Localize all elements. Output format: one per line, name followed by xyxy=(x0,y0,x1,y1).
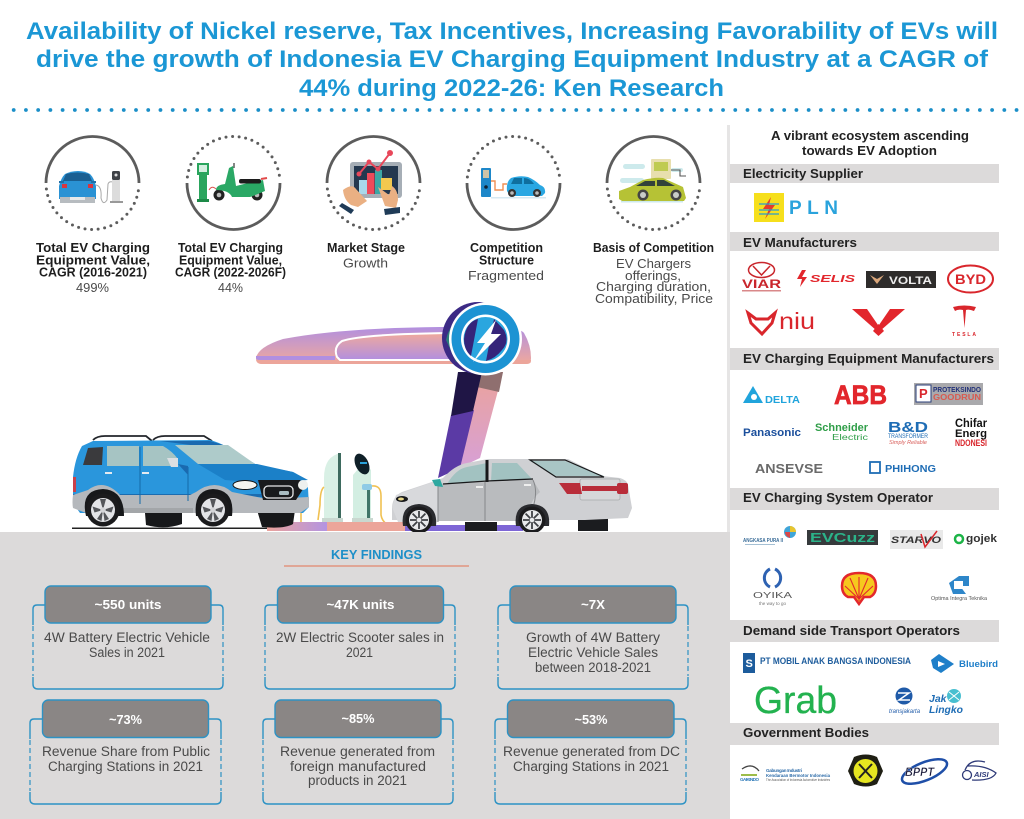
logo: PT Mobil Anak Bangsa: PT MOBIL ANAK BANGSA INDONESIA xyxy=(760,656,911,667)
logo: Gojek: gojek xyxy=(966,533,998,545)
logo: Schneider Electric xyxy=(815,422,869,442)
label xyxy=(327,241,405,270)
logo: Schneider Electric: Schneider xyxy=(815,422,869,434)
stat: competition structure xyxy=(467,137,560,283)
label xyxy=(593,241,714,306)
card: 73%: Revenue Share from Public xyxy=(42,744,210,759)
logo: JakLingko: Jak xyxy=(929,693,948,705)
section: government bodies: Government Bodies xyxy=(743,725,869,740)
card: 47K units: 2W Electric Scooter sales in xyxy=(276,630,444,645)
logo: Transjakarta: transjakarta xyxy=(889,709,921,715)
logo: BYD xyxy=(948,266,993,292)
card: 85% xyxy=(263,700,453,804)
logo: B&D Transformer: TRANSFORMER xyxy=(888,434,929,440)
label xyxy=(36,241,150,295)
logo: Panasonic: Panasonic xyxy=(743,427,801,439)
icon: green scooter at charger xyxy=(197,163,267,202)
label: Charging duration, xyxy=(596,280,711,294)
label: Competition xyxy=(470,241,543,255)
card: 53% xyxy=(495,700,686,804)
card: 73%: ~73% xyxy=(109,713,142,727)
logo: Ansevse: ANSEVSE xyxy=(755,461,823,476)
logo: Phihong xyxy=(870,462,936,475)
label: 44% xyxy=(218,281,243,295)
card: 550 units: ~550 units xyxy=(94,598,162,612)
logo: EVCuzz: EVCuzz xyxy=(810,530,876,545)
title: Availability of Nickel reserve, Tax Incentives, Increasing Favorability of EVs will xyxy=(26,18,998,45)
logo: ABB: ABB xyxy=(834,380,887,410)
card: 550 units xyxy=(33,586,223,689)
logo: B&D Transformer: B&D xyxy=(888,419,928,436)
card: 7X: Electric Vehicle Sales xyxy=(528,645,658,660)
label: Equipment Value, xyxy=(36,254,150,268)
section: EV charging equipment manufacturers: EV Charging Equipment Manufacturers xyxy=(743,351,994,366)
logo: Gaikindo: Kendaraan Bermotor Indonesia xyxy=(766,773,830,778)
logo: Volta xyxy=(866,271,936,288)
logo: Chifar Energi Indonesia: NDONESI xyxy=(955,438,987,449)
card: 53%: Charging Stations in 2021 xyxy=(513,759,669,774)
logo: BPPT: BPPT xyxy=(905,767,935,779)
card: 85%: Revenue generated from xyxy=(280,744,435,759)
logo: AISI xyxy=(962,761,996,780)
logo: JakLingko: Lingko xyxy=(929,704,964,716)
logo: Chifar Energi Indonesia xyxy=(955,416,987,449)
heading: ecosystem xyxy=(771,128,969,158)
logo: Starvo: STARVO xyxy=(891,535,941,545)
card: 53%: Revenue generated from DC xyxy=(503,744,680,759)
logo: Tesla: TESLA xyxy=(952,332,976,338)
logo: Bluebird xyxy=(931,654,998,673)
logo: JakLingko xyxy=(929,689,964,716)
logo: Selis: SELIS xyxy=(810,274,855,285)
logo: PT Mobil Anak Bangsa: S xyxy=(746,658,753,670)
label: Structure xyxy=(479,254,534,268)
silver sedan xyxy=(392,459,632,534)
logo: Delta: DELTA xyxy=(765,394,800,406)
logo: Proteksindo Goodrun: GOODRUN xyxy=(933,393,981,402)
logo: Oyika xyxy=(753,569,792,606)
card: 7X: Growth of 4W Battery xyxy=(526,630,660,645)
card: 73% xyxy=(30,700,221,804)
logo: BPPT xyxy=(899,754,950,789)
logo: Proteksindo Goodrun xyxy=(914,383,983,405)
card: 550 units: 4W Battery Electric Vehicle xyxy=(44,630,210,645)
logo: Viar: VIAR xyxy=(742,277,781,291)
logo: Proteksindo Goodrun: P xyxy=(919,386,928,401)
label: Total EV Charging xyxy=(178,241,283,255)
logo: Starvo xyxy=(890,530,943,549)
logo: Grab: Grab xyxy=(754,680,837,722)
section: government bodies xyxy=(730,723,999,789)
label: Compatibility, Price xyxy=(595,292,713,306)
icon: blue charger and car xyxy=(481,168,546,198)
title: drive the growth of Indonesia EV Charging Equipment Industry at a CAGR of xyxy=(36,46,989,73)
section: EV charging system operator: EV Charging System Operator xyxy=(743,490,933,505)
logo: B&D Transformer: Simply Reliable xyxy=(889,440,927,446)
title xyxy=(26,18,998,102)
logo: Gaikindo: GAIKINDO xyxy=(740,777,759,782)
icon: yellow car and charging screen xyxy=(619,159,686,202)
card: 85%: products in 2021 xyxy=(308,773,407,788)
logo: Proteksindo Goodrun: PROTEKSINDO xyxy=(933,387,982,394)
logo: Gaikindo xyxy=(740,766,830,782)
logo: BYD: BYD xyxy=(955,271,986,287)
logo: Bluebird: Bluebird xyxy=(959,659,998,670)
logo: NIU xyxy=(748,308,815,334)
card: 47K units: ~47K units xyxy=(326,598,395,612)
label xyxy=(175,241,286,295)
logo: Optima Integra Teknika xyxy=(931,576,988,602)
illustration: EV charging station with cars xyxy=(72,302,632,534)
card: 85%: foreign manufactured xyxy=(290,759,426,774)
logo: EVCuzz xyxy=(807,530,878,545)
panel: key findings background xyxy=(0,532,730,819)
title: 44% during 2022-26: Ken Research xyxy=(299,75,724,102)
card: 47K units: 2021 xyxy=(346,645,373,660)
section: EV charging system operator xyxy=(730,488,999,606)
card: 73%: Charging Stations in 2021 xyxy=(48,759,203,774)
station canopy and pole xyxy=(256,327,531,478)
stat: EV charging value CAGR 2016-2021 xyxy=(36,136,150,295)
logo: PLN xyxy=(754,193,838,222)
station sign with lightning bolt xyxy=(442,302,522,376)
label: offerings, xyxy=(625,269,681,283)
logo: Gaikindo: The Association of Indonesia Automotive Industries xyxy=(766,778,830,782)
icon: blue car at charger xyxy=(59,171,123,203)
card: 7X xyxy=(498,586,688,689)
logo: Gojek xyxy=(955,533,998,545)
logo: Volta: VOLTA xyxy=(889,275,932,287)
logo: Delta xyxy=(743,386,800,406)
card: 7X: between 2018-2021 xyxy=(535,660,651,675)
icon: tablet with chart and hands xyxy=(339,150,402,215)
logo: Wuling xyxy=(852,309,905,336)
logo: Shell xyxy=(842,573,876,604)
blue SUV xyxy=(72,436,309,528)
card: 85%: ~85% xyxy=(342,712,374,726)
charging posts xyxy=(287,451,400,527)
logo: NIU: niu xyxy=(779,308,815,334)
stat: basis of competition xyxy=(593,136,714,306)
label: Growth xyxy=(343,256,388,270)
label: CAGR (2022-2026F) xyxy=(175,266,286,280)
logo: PT Mobil Anak Bangsa xyxy=(743,653,911,673)
logo: Phihong: PHIHONG xyxy=(885,463,936,475)
label: 499% xyxy=(76,281,109,295)
section: EV manufacturers xyxy=(730,232,999,338)
heading: ecosystem: towards EV Adoption xyxy=(802,143,937,158)
section: electricity supplier xyxy=(730,164,999,222)
label: CAGR (2016-2021) xyxy=(39,266,147,280)
section: demand side transport operators xyxy=(730,620,999,722)
logo: Schneider Electric: Electric xyxy=(832,432,869,442)
label: Basis of Competition xyxy=(593,241,714,255)
label: Equipment Value, xyxy=(179,254,282,268)
section: demand side transport operators: Demand side Transport Operators xyxy=(743,623,960,638)
section: EV manufacturers: EV Manufacturers xyxy=(743,235,857,250)
section: electricity supplier: Electricity Supplier xyxy=(743,166,863,181)
logo: Oyika: OYIKA xyxy=(753,590,792,600)
logo: Chifar Energi Indonesia: Chifar xyxy=(955,416,987,430)
stat: EV charging value CAGR 2022-2026F xyxy=(175,137,286,295)
logo: Gaikindo: Gabungan Industri xyxy=(766,768,802,773)
logo: Angkasa Pura II: ANGKASA PURA II xyxy=(743,538,783,544)
logo: Selis xyxy=(797,270,855,287)
logo: Optima Integra Teknika: Optima Integra Teknika xyxy=(931,596,988,602)
label: EV Chargers xyxy=(616,257,691,271)
logo: PLN: PLN xyxy=(789,198,838,219)
stat: market stage xyxy=(327,136,420,270)
heading: key findings: KEY FINDINGS xyxy=(331,548,422,562)
ground shadow and platform xyxy=(72,522,523,531)
logo: B&D Transformer xyxy=(888,419,929,446)
logo: Chifar Energi Indonesia: Energ xyxy=(955,428,987,440)
label: Market Stage xyxy=(327,241,405,255)
label xyxy=(468,241,544,283)
card: 550 units: Sales in 2021 xyxy=(89,645,165,660)
heading: ecosystem: A vibrant ecosystem ascending xyxy=(771,128,969,143)
section: EV charging equipment manufacturers xyxy=(730,348,999,476)
card: 7X: ~7X xyxy=(581,598,606,612)
logo: ministry emblem xyxy=(848,754,883,786)
logo: Viar xyxy=(742,262,781,292)
label: Fragmented xyxy=(468,269,544,283)
label: Total EV Charging xyxy=(36,241,150,255)
logo: Angkasa Pura II xyxy=(743,526,796,545)
logo: AISI: AISI xyxy=(973,770,990,779)
logo: Transjakarta xyxy=(889,688,921,715)
logo: Tesla xyxy=(952,306,976,338)
card: 47K units xyxy=(265,586,455,689)
card: 53%: ~53% xyxy=(574,713,608,727)
logo: Oyika: the way to go xyxy=(759,601,786,606)
